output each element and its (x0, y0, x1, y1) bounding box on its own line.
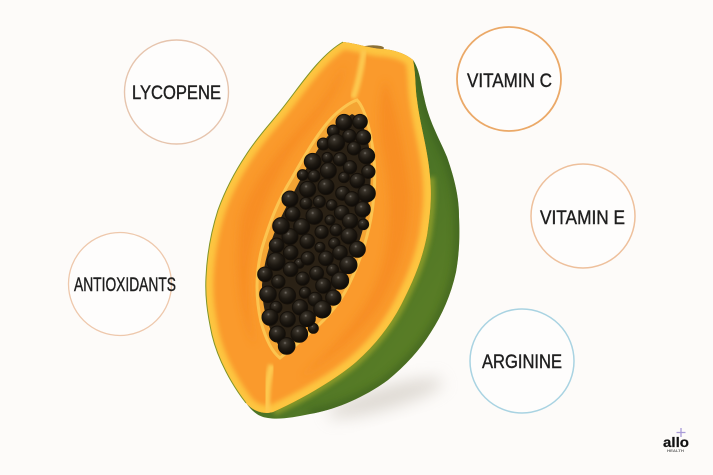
circle: lycopene (124, 40, 228, 144)
circle: vitamin c: VITAMIN C (467, 71, 552, 92)
circle: antioxidants (68, 232, 176, 336)
circle: lycopene: LYCOPENE (132, 83, 221, 104)
seed cavity (257, 100, 375, 358)
flesh shading (206, 42, 431, 414)
stem (362, 45, 384, 51)
circle: vitamin c (457, 27, 561, 131)
circle: antioxidants: ANTIOXIDANTS (74, 275, 176, 296)
ground shadow (324, 371, 446, 425)
logo: allo health (663, 428, 689, 453)
lower lobe deep orange (335, 92, 408, 350)
circle: arginine (470, 309, 574, 413)
logo star (676, 428, 686, 437)
papaya flesh (206, 42, 431, 413)
circle: vitamin e: VITAMIN E (540, 208, 625, 229)
papaya skin (206, 42, 459, 419)
left rim line (206, 42, 343, 403)
seeds (258, 114, 375, 354)
logo wordmark: allo (663, 434, 689, 450)
papaya illustration (206, 42, 459, 419)
top seam (353, 50, 364, 98)
circle: arginine: ARGININE (482, 352, 562, 373)
upper lobe deep orange (240, 107, 322, 307)
yellow rim (206, 42, 431, 413)
circle: vitamin e (531, 164, 635, 268)
bottom seam (267, 365, 272, 414)
logo subtitle: HEALTH (667, 448, 684, 453)
skin shading (274, 60, 459, 414)
cavity dark interior (262, 114, 371, 350)
